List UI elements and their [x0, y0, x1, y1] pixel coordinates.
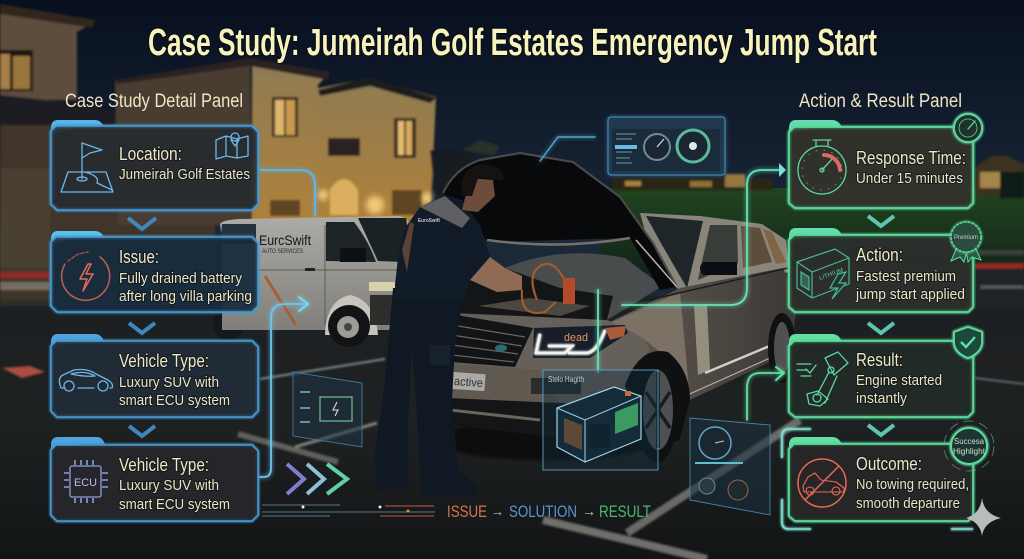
HUD: dashboard window: [608, 117, 725, 175]
ground streaks: [0, 250, 1024, 559]
panel: action: jump start applied: [855, 286, 965, 303]
panel: issue: after long villa parking: [119, 288, 252, 305]
HUD: battery health: [543, 370, 658, 470]
van logo: EurcSwift: [259, 232, 311, 248]
icon: no towing: [798, 459, 846, 507]
sparkle: [966, 498, 1001, 536]
open bonnet: [443, 153, 677, 290]
badge: premium rosette: Premium: [954, 235, 978, 241]
badge: success highlight: [944, 421, 994, 471]
grille: [451, 314, 533, 367]
bonnet surface and engine bay: [450, 253, 662, 320]
panel: ecu: smart ECU system: [119, 496, 230, 513]
icon: stopwatch: [798, 140, 846, 194]
panel: outcome: [789, 421, 994, 521]
icon: ecu chip: [64, 460, 108, 503]
panel: ecu: [51, 437, 258, 521]
icon: golf flag: [61, 143, 113, 192]
chevron: [129, 323, 155, 333]
panel: action: Fastest premium: [856, 268, 956, 285]
icon: suv: [59, 370, 112, 391]
chevron: [868, 323, 894, 333]
signal lines: [262, 505, 435, 516]
panel: response time: [789, 114, 982, 208]
panel: response time: Under 15 minutes: [856, 170, 963, 187]
panel: action: Action:: [856, 245, 903, 265]
icon: map pin: [216, 133, 248, 159]
HUD: small battery diagnostics: [293, 372, 362, 447]
panel: issue: Issue:: [119, 247, 159, 267]
wheels: [625, 313, 796, 463]
issue solution result strip: [447, 502, 651, 521]
mechanic: EuroSwift: [418, 218, 440, 224]
panel: ecu: Vehicle Type:: [119, 455, 209, 475]
panel: vehicle type: [51, 334, 258, 417]
panel: response time: Response Time:: [856, 148, 966, 168]
panel: vehicle type: Vehicle Type:: [119, 351, 209, 371]
panel: result: Engine started: [856, 372, 942, 389]
icon: ecu chip: ECU: [74, 477, 97, 489]
panel: vehicle type: smart ECU system: [119, 392, 230, 409]
chevron: [868, 425, 894, 435]
chevron: [128, 218, 156, 229]
distant villas and lights: [612, 156, 1024, 195]
badge: premium rosette: [951, 222, 981, 262]
bumper: [448, 364, 640, 436]
issue solution result strip: ISSUE: [447, 502, 487, 521]
range rover: [448, 213, 797, 463]
icon: piston: [797, 352, 848, 406]
van logo: [259, 232, 311, 255]
panel: outcome: smooth departure: [856, 495, 960, 512]
issue solution result strip: SOLUTION: [509, 502, 577, 521]
panel: result: Result:: [856, 350, 903, 370]
panel: vehicle type: Luxury SUV with: [119, 374, 219, 391]
issue solution result strip: RESULT: [599, 502, 651, 521]
side details: [694, 304, 710, 375]
van: [213, 216, 410, 347]
HUD: battery health: Stelo Hagith: [548, 375, 584, 384]
panel: location: [51, 120, 258, 210]
battery graphic: [557, 387, 641, 462]
panel: location: Location:: [119, 144, 182, 164]
panel: outcome: No towing required,: [856, 476, 969, 493]
left house: [0, 4, 215, 300]
bumper: active: [454, 374, 484, 390]
panel: issue: Fully drained battery: [119, 270, 242, 287]
icon: lithium battery: [797, 249, 849, 299]
van logo: AUTO SERVICES: [262, 249, 303, 255]
badge: success highlight: Highlight: [953, 447, 986, 456]
chevron: [868, 216, 894, 226]
panel: ecu: Luxury SUV with: [119, 477, 219, 494]
main villa: [115, 58, 500, 225]
body front: [452, 312, 650, 432]
icon: gauge badge: [954, 114, 982, 142]
jump leads: [522, 264, 575, 313]
panel: action: [789, 222, 981, 312]
chevron: [129, 426, 155, 436]
icon: shield check: [954, 327, 982, 358]
connector arrowhead: [779, 163, 786, 177]
panel: outcome: Outcome:: [856, 454, 922, 474]
HUD: gauges: [690, 418, 770, 515]
badge: success highlight: Succesa: [954, 437, 985, 446]
panel: result: instantly: [856, 390, 907, 407]
icon: lithium battery: LITHIUM: [819, 268, 844, 282]
heading: left panel group: Case Study Detail Panel: [65, 91, 243, 112]
body side: [610, 268, 797, 440]
issue solution result strip: →: [582, 503, 596, 519]
flow chevrons: [287, 464, 347, 494]
mechanic: [375, 164, 522, 497]
panel: issue: [51, 231, 258, 312]
headlight: dead: [564, 332, 588, 344]
highlight brackets: [782, 429, 973, 529]
panel: location: Jumeirah Golf Estates: [119, 166, 250, 183]
connector lines: [258, 137, 784, 477]
headlight: [533, 325, 628, 358]
icon: drained battery bolt: [62, 252, 110, 300]
roof and glass: [640, 213, 790, 292]
issue solution result strip: →: [491, 503, 504, 519]
panel: result: [789, 327, 982, 417]
heading: right panel group: Action & Result Panel: [799, 91, 962, 112]
